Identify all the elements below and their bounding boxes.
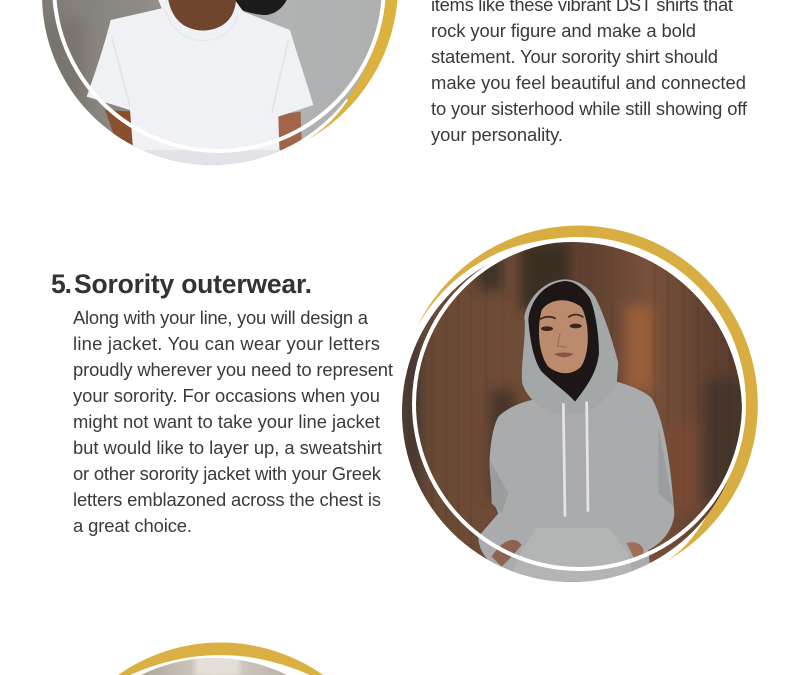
- white backing: hoodie: [413, 238, 745, 570]
- text block: item 4 body copy: make you feel beautiful and connected: [431, 72, 746, 93]
- white ring: hoodie: [414, 239, 744, 569]
- text block: item 5 body copy: but would like to layer up, a sweatshirt: [73, 437, 382, 458]
- text block: item 4 body copy: [431, 0, 748, 145]
- text block: item 5 body copy: [73, 307, 393, 536]
- gold crescent: bottom: [118, 643, 323, 675]
- text block: item 5 body copy: a great choice.: [73, 515, 192, 536]
- text block: item 5 body copy: your sorority. For occasions when you: [73, 385, 380, 406]
- photo: bottom circle: [141, 658, 287, 675]
- text block: item 5 body copy: or other sorority jacket with your Greek: [73, 463, 382, 484]
- gold crescent: shirt: [219, 0, 398, 148]
- wood grain: [432, 245, 730, 560]
- text block: item 5 body copy: letters emblazoned across the chest is: [73, 489, 381, 510]
- panel: item 5 hoodie photo: [400, 226, 758, 585]
- white backing: shirt: [54, 0, 384, 148]
- photo: woman in grey hoodie: [400, 240, 745, 585]
- text block: item 4 body copy: rock your figure and make a bold: [431, 20, 696, 41]
- panel: item 6 photo (partly visible): [118, 643, 323, 675]
- text block: item 5 body copy: might not want to take your line jacket: [73, 411, 380, 432]
- text block: item 4 body copy: statement. Your sorority shirt should: [431, 46, 718, 67]
- text block: item 4 body copy: to your sisterhood while still showing off: [431, 98, 748, 119]
- panel: item 4 shirt photo: [40, 0, 398, 173]
- photo: woman in white t-shirt: [40, 0, 385, 173]
- gold crescent: hoodie: [417, 226, 758, 567]
- white ring: shirt: [55, 0, 383, 151]
- text block: item 5 body copy: Along with your line, you will design a: [73, 307, 369, 328]
- text block: item 4 body copy: your personality.: [431, 124, 563, 145]
- text block: item 5 body copy: line jacket. You can wear your letters: [73, 333, 380, 354]
- heading: sorority outerwear: 5.: [51, 269, 72, 299]
- text block: item 5 body copy: proudly wherever you need to represent: [73, 359, 393, 380]
- heading: sorority outerwear: Sorority outerwear.: [74, 269, 312, 299]
